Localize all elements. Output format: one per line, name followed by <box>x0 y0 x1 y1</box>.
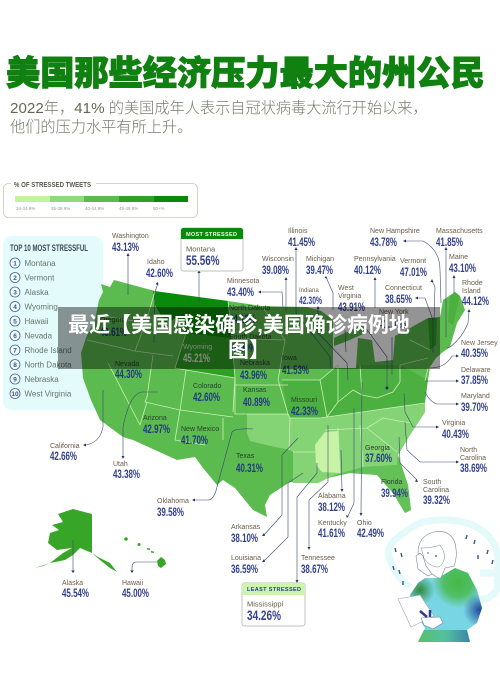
callout: least stressed Mississippi: Mississippi <box>247 600 284 608</box>
state value labels: 41.70% <box>181 433 208 447</box>
state value labels: 36.59% <box>231 562 258 576</box>
Florida <box>335 455 411 513</box>
state value labels: 47.01% <box>400 265 427 279</box>
state value labels: Kentucky <box>318 520 347 527</box>
Montana <box>153 291 232 338</box>
lighter southern states <box>289 403 425 483</box>
state value labels: Colorado <box>193 383 222 390</box>
callout: least stressed Mississippi <box>242 583 305 626</box>
state value labels: 39.58% <box>157 505 184 519</box>
legend: % of stressed tweets: 45-49.9% <box>119 206 138 211</box>
overlay banner: 图】 <box>228 339 270 362</box>
callout: most stressed Montana: 55.56% <box>186 252 220 268</box>
state value labels: 45.00% <box>122 586 149 600</box>
panel: top 10 most stressful: Montana <box>24 259 56 268</box>
panel: top 10 most stressful <box>3 236 103 410</box>
panel: top 10 most stressful: Wyoming <box>24 302 58 312</box>
state value labels: 44.30% <box>115 367 142 381</box>
panel: top 10 most stressful: Hawaii <box>24 317 49 326</box>
map of the contiguous United States <box>81 280 465 517</box>
state value labels: 38.12% <box>318 500 345 514</box>
panel: top 10 most stressful: North Dakota <box>24 360 72 370</box>
state value labels: 43.10% <box>449 261 476 275</box>
hand on cheek <box>416 553 432 576</box>
connector lines <box>83 240 470 583</box>
legend: % of stressed tweets: 50+% <box>153 206 165 211</box>
illustration: stressed woman with tablet <box>388 520 498 645</box>
state value labels: 38.69% <box>460 461 487 475</box>
state value labels: Florida <box>381 479 403 486</box>
subtitle: 他们的压力水平有所上升。 <box>10 119 192 136</box>
callout: most stressed Montana <box>181 228 243 271</box>
state value labels: 42.60% <box>193 390 220 404</box>
state value labels: Oklahoma <box>157 498 189 505</box>
state value labels: Ohio <box>357 520 372 527</box>
legend: % of stressed tweets: 35-39.9% <box>51 206 70 211</box>
panel: top 10 most stressful: 10 <box>11 391 19 398</box>
state value labels: 45.54% <box>62 586 89 600</box>
state value labels: 43.90% <box>229 341 256 355</box>
state value labels: Michigan <box>306 256 334 263</box>
state value labels: 37.60% <box>365 451 392 465</box>
panel: top 10 most stressful: 7 <box>13 348 17 354</box>
state value labels: Indiana <box>299 288 319 294</box>
state value labels: Nevada <box>115 361 139 368</box>
state value labels: 38.10% <box>231 531 258 545</box>
state value labels: Texas <box>236 453 255 460</box>
hair and face <box>418 531 456 578</box>
state value labels: 43.61% <box>100 325 127 339</box>
state value labels: New Mexico <box>181 426 219 433</box>
state value labels: Georgia <box>365 445 390 452</box>
panel: top 10 most stressful: TOP 10 MOST STRESSFUL <box>10 243 88 253</box>
state value labels: Alabama <box>318 493 346 500</box>
hand with pen <box>421 617 443 629</box>
state value labels: Maine <box>449 254 468 261</box>
state value labels: 39.47% <box>306 263 333 277</box>
panel: top 10 most stressful: 6 <box>13 333 17 340</box>
state value labels: Iowa <box>282 355 297 362</box>
state value labels: West <box>338 285 354 292</box>
panel: top 10 most stressful: 1 <box>13 260 17 268</box>
subtitle: 2022年，41% 的美国成年人表示自冠状病毒大流行开始以来， <box>10 100 428 117</box>
state value labels: 40.89% <box>243 395 270 409</box>
tablet <box>398 595 434 627</box>
state value labels: Delaware <box>461 367 491 374</box>
state value labels: Island <box>462 288 481 295</box>
state value labels: 43.13% <box>112 240 139 254</box>
legend: % of stressed tweets: 34-34.9% <box>16 206 35 211</box>
state value labels: Illinois <box>288 228 308 235</box>
state value labels: Carolina <box>423 487 449 494</box>
state value labels: Hawaii <box>122 580 143 587</box>
panel: top 10 most stressful: Rhode Island <box>24 346 72 355</box>
icon: Alaska map <box>35 509 117 572</box>
state value labels: 45.21% <box>183 351 210 365</box>
state value labels: 40.43% <box>442 427 469 441</box>
state value labels: Missouri <box>291 397 318 404</box>
state value labels: South Dakota <box>229 334 272 341</box>
state value labels: Carolina <box>460 455 486 462</box>
state value labels: 38.65% <box>385 292 412 306</box>
panel: top 10 most stressful: Vermont <box>24 274 55 282</box>
state value labels: Kansas <box>243 387 267 394</box>
subtitle <box>10 100 428 136</box>
state value labels: 42.33% <box>291 404 318 418</box>
overlay banner <box>58 307 440 369</box>
icon: Hawaii islands <box>124 537 166 568</box>
state value labels: 41.53% <box>282 363 309 377</box>
state value labels: 41.45% <box>288 235 315 249</box>
panel: top 10 most stressful: Nevada <box>24 332 53 340</box>
state value labels: Arkansas <box>231 524 261 531</box>
callout: most stressed Montana: MOST STRESSED <box>186 232 237 238</box>
state value labels: Louisiana <box>231 555 261 562</box>
panel: top 10 most stressful: 9 <box>13 376 17 384</box>
state value labels: 43.96% <box>240 368 267 382</box>
Vermont <box>428 318 437 350</box>
state value labels: Maryland <box>461 393 490 400</box>
Alaska and Hawaii connectors <box>71 540 157 573</box>
panel: top 10 most stressful: 3 <box>13 290 17 296</box>
state value labels: 43.78% <box>370 235 397 249</box>
state value labels: Connecticut <box>385 285 422 292</box>
state value labels: North <box>460 447 477 454</box>
state value labels: 41.85% <box>436 235 463 249</box>
state value labels: North Dakota <box>229 305 270 312</box>
state value labels: Alaska <box>62 580 83 587</box>
darker mid-Atlantic states <box>282 365 428 418</box>
panel: top 10 most stressful: 2 <box>13 275 17 282</box>
title: 美国那些经济压力最大的州公民 <box>6 45 485 95</box>
Mississippi <box>315 431 340 473</box>
state value labels: 42.30% <box>299 295 322 307</box>
state value labels: Nebraska <box>240 360 270 367</box>
state value labels: Washington <box>112 233 149 240</box>
state value labels: 40.12% <box>354 263 381 277</box>
panel: top 10 most stressful: Alaska <box>24 288 49 297</box>
panel: top 10 most stressful: 5 <box>13 318 17 326</box>
state value labels: 41.16% <box>379 317 406 331</box>
Wyoming <box>175 333 235 378</box>
state value labels: 38.67% <box>301 562 328 576</box>
state value labels: 43.38% <box>113 467 140 481</box>
state value labels: Minnesota <box>227 278 259 285</box>
panel: top 10 most stressful: 4 <box>13 304 17 311</box>
panel: top 10 most stressful: Nebraska <box>24 375 59 384</box>
state value labels: Arizona <box>143 415 167 422</box>
overlay banner: 最近【美国感染确诊,美国确诊病例地 <box>68 314 410 337</box>
state value labels: 42.66% <box>50 449 77 463</box>
Great Lakes <box>312 304 428 368</box>
state value labels: 40.31% <box>236 461 263 475</box>
state value labels: South <box>423 479 441 486</box>
panel: top 10 most stressful: West Virginia <box>24 390 72 398</box>
legend: % of stressed tweets: 40-44.9% <box>85 206 104 211</box>
state value labels: 39.32% <box>423 493 450 507</box>
callout: least stressed Mississippi: 34.26% <box>247 607 281 623</box>
state value labels: 42.49% <box>357 526 384 540</box>
sweat drops <box>393 535 493 585</box>
state value labels: Oregon <box>100 317 123 324</box>
state value labels: Pennsylvania <box>354 256 396 263</box>
state value labels: 42.60% <box>146 266 173 280</box>
state value labels: Vermont <box>400 258 426 265</box>
state value labels: California <box>50 443 80 450</box>
Michigan upper peninsula <box>334 325 368 346</box>
state value labels: 42.97% <box>143 422 170 436</box>
state value labels: Wyoming <box>183 344 212 351</box>
state value labels: Utah <box>113 461 128 468</box>
state value labels: Massachusetts <box>436 228 483 235</box>
state value labels: Virginia <box>338 293 361 300</box>
Oklahoma <box>247 414 291 450</box>
panel: top 10 most stressful: 8 <box>13 362 17 369</box>
pale halo <box>388 520 498 600</box>
callout: most stressed Montana: Montana <box>186 244 216 254</box>
legend: % of stressed tweets: % OF STRESSED TWEETS <box>14 180 91 189</box>
state value labels: Rhode <box>462 280 483 287</box>
state borders <box>87 291 430 473</box>
state value labels: Wisconsin <box>262 256 294 263</box>
state value labels: New York <box>379 309 409 316</box>
darker Maine centre <box>448 292 460 325</box>
state value labels: 41.61% <box>318 526 345 540</box>
state value labels: 44.12% <box>229 312 256 326</box>
state value labels: 43.91% <box>338 300 365 314</box>
state value labels <box>50 228 498 600</box>
legend: % of stressed tweets <box>4 180 198 218</box>
state value labels: Virginia <box>442 420 465 427</box>
state value labels: Tennessee <box>301 555 335 562</box>
state value labels: Idaho <box>147 259 165 266</box>
state value labels: 39.08% <box>262 263 289 277</box>
state value labels: 39.94% <box>381 486 408 500</box>
state value labels: New Hampshire <box>370 228 420 235</box>
callout: least stressed Mississippi: LEAST STRESSED <box>247 587 301 593</box>
state value labels: New Jersey <box>461 340 498 347</box>
state value labels: 43.40% <box>227 285 254 299</box>
